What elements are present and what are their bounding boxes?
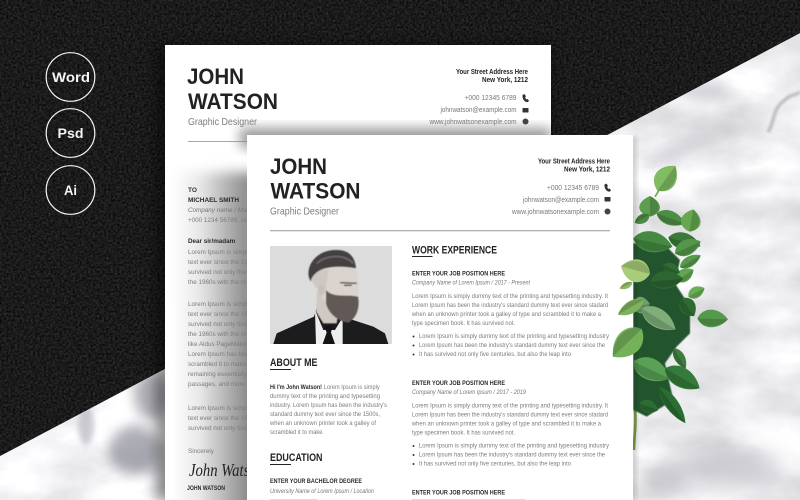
back header name: JOHN xyxy=(187,64,244,89)
back letter body xyxy=(188,238,288,455)
front page edge shadow xyxy=(630,137,636,500)
job entry 2: Lorem Ipsum has been the industry's standard dummy text ever since stadard xyxy=(412,412,608,418)
front header name xyxy=(270,154,360,204)
job entry 2: Lorem Ipsum is simply dummy text of the printing and typesetting industry xyxy=(419,442,610,450)
front header name: JOHN xyxy=(270,154,327,179)
job entry 2: Lorem Ipsum has been the industry's standard dummy text ever since the xyxy=(419,452,605,458)
back letter body: text ever since the 1500s, when xyxy=(188,415,277,422)
back contact block: johnwatson@example.com xyxy=(440,107,517,114)
job entry 3: ENTER YOUR JOB POSITION HERE xyxy=(412,490,506,496)
back letter body: Sincerely xyxy=(188,448,215,455)
job entry 1: Lorem Ipsum is simply dummy text of the printing and typesetting industry xyxy=(419,333,610,340)
education entry xyxy=(270,478,374,495)
job entry 2: ENTER YOUR JOB POSITION HERE xyxy=(412,380,506,387)
badge: Word: Word xyxy=(52,70,90,85)
education entry: ENTER YOUR BACHELOR DEGREE xyxy=(270,478,363,485)
about me text xyxy=(269,384,387,436)
back header name xyxy=(187,64,278,114)
job entry 1: Lorem Ipsum is simply dummy text of the printing and typesetting industry. It xyxy=(412,293,608,300)
badge: Psd: Psd xyxy=(58,126,84,141)
job entry 1: Lorem Ipsum has been the industry's standard dummy text ever since the xyxy=(419,342,605,349)
back letter body: survived not only five centuries xyxy=(188,269,274,276)
front contact block: johnwatson@example.com xyxy=(522,197,599,204)
portrait photo xyxy=(270,246,392,344)
job entry 1: Company Name of Lorem Ipsum / 2017 - Present xyxy=(412,280,530,286)
back signer name: JOHN WATSON xyxy=(187,485,225,492)
work experience heading: WORK EXPERIENCE xyxy=(412,244,497,256)
back letter body: text ever since the 1500s, when xyxy=(188,259,277,266)
about me text: scrambled it to make. xyxy=(270,429,324,436)
back contact block: +000 12345 6789 xyxy=(464,95,517,102)
back contact block xyxy=(429,69,529,126)
front contact block: +000 12345 6789 xyxy=(547,185,599,192)
back letter body: Lorem Ipsum has been the industry xyxy=(188,351,288,358)
about me text: Hi I'm John Watson! xyxy=(270,384,322,391)
front header name: WATSON xyxy=(270,178,360,204)
front resume page xyxy=(247,135,633,500)
back letter body: passages, and more recently xyxy=(188,381,270,388)
back letter body: Lorem Ipsum is simply dummy text xyxy=(188,249,285,256)
badge: Word xyxy=(46,53,95,101)
about me text: dummy text of the printing and typesetting xyxy=(270,393,380,400)
job entry 1: ENTER YOUR JOB POSITION HERE xyxy=(412,270,506,278)
job entry 1: It has survived not only five centuries, but also the leap into xyxy=(419,351,571,358)
back letter body: Dear sir/madam xyxy=(188,238,236,245)
job entry 2: Company Name of Lorem Ipsum / 2017 - 2019 xyxy=(412,389,526,396)
job entry 2: It has survived not only five centuries, but also the leap into xyxy=(419,460,571,468)
back letter recipient: +000 1234 56789, company@mail.com xyxy=(188,217,298,224)
back letter recipient: MICHAEL SMITH xyxy=(188,197,239,204)
back contact block: www.johnwatsonexample.com xyxy=(429,119,517,126)
back contact block: New York, 1212 xyxy=(482,77,528,84)
back letter body: survived not only five centuries xyxy=(188,321,274,328)
badge: Ai: Ai xyxy=(64,183,77,198)
icon: mail xyxy=(604,197,610,202)
education heading: EDUCATION xyxy=(270,452,323,464)
shadow of front page on back page xyxy=(172,128,551,500)
job entry 2 xyxy=(411,380,610,468)
back header name: WATSON xyxy=(188,89,278,114)
badge: Ai xyxy=(46,166,95,214)
front job title: Graphic Designer xyxy=(270,206,339,218)
job entry 2: type specimen book. It has survived not. xyxy=(412,430,515,436)
job entry 1: type specimen book. It has survived not. xyxy=(412,320,515,327)
back letter body: the 1960s with the release of xyxy=(188,279,269,286)
education entry: University Name of Lorem Ipsum / Location xyxy=(270,488,374,495)
about me text: Lorem Ipsum is simply xyxy=(324,384,380,391)
format badges xyxy=(46,53,95,214)
back resume page xyxy=(155,44,551,500)
about me heading: ABOUT ME xyxy=(270,357,318,369)
job entry 1: Lorem Ipsum has been the industry's standard dummy text ever since stadard xyxy=(412,302,608,309)
back job title: Graphic Designer xyxy=(188,116,257,128)
signature: John Watson xyxy=(189,460,264,480)
about me text: when an unknown printer took a galley of xyxy=(269,420,376,427)
about me text: industry. Lorem Ipsum has been the industry's xyxy=(270,402,387,409)
job entry 1: when an unknown printer took a galley of type and scrambled it to make a xyxy=(411,311,601,318)
front contact block: Your Street Address Here xyxy=(538,158,610,166)
back letter body: remaining essentially unchanged xyxy=(188,371,280,378)
front contact block: New York, 1212 xyxy=(564,166,610,174)
back letter recipient: Company name / Manager xyxy=(188,207,263,214)
icon: globe xyxy=(604,208,610,214)
back letter recipient xyxy=(188,187,298,224)
front contact block: www.johnwatsonexample.com xyxy=(511,209,599,216)
back letter body: like Aldus PageMaker including xyxy=(188,341,276,348)
back letter body: text ever since the 1500s, when xyxy=(188,311,277,318)
back letter body: Lorem Ipsum is simply dummy text xyxy=(188,405,285,412)
back letter body: scrambled it to make a type xyxy=(188,361,265,368)
icon: phone xyxy=(604,184,611,192)
front contact block xyxy=(511,158,611,216)
job entry 1 xyxy=(411,270,610,358)
job entry 2: when an unknown printer took a galley of type and scrambled it to make a xyxy=(411,420,601,428)
plant behind page xyxy=(629,159,728,450)
back letter recipient: TO xyxy=(188,187,197,194)
job entry 2: Lorem Ipsum is simply dummy text of the printing and typesetting industry. It xyxy=(412,402,608,410)
back contact block: Your Street Address Here xyxy=(456,69,528,76)
plant leaves overlapping page xyxy=(605,256,653,366)
about me text: standard dummy text ever since the 1500s, xyxy=(270,411,380,418)
back letter body: Lorem Ipsum is simply dummy text xyxy=(188,301,285,308)
back letter body: survived not only five centuries xyxy=(188,425,274,432)
badge: Psd xyxy=(46,109,95,157)
back letter body: the 1960s with the release of xyxy=(188,331,269,338)
